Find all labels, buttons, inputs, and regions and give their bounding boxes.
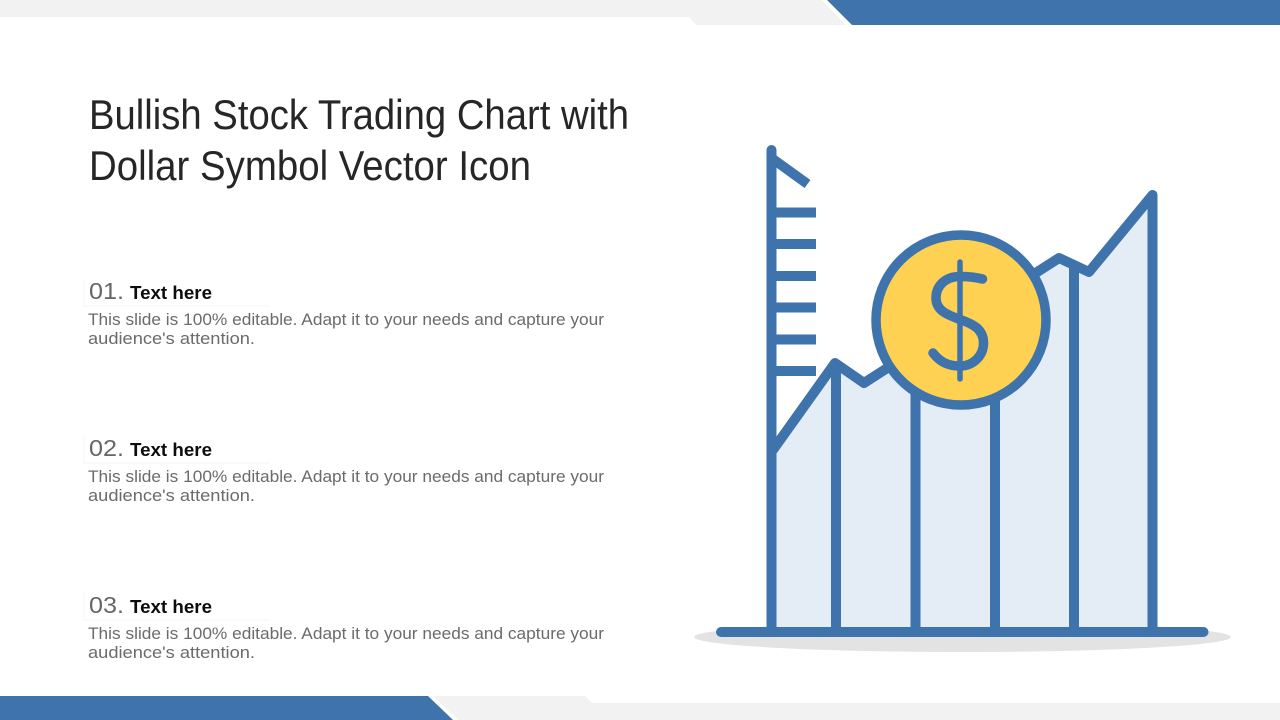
text block 02: 02. (89, 435, 124, 461)
text block 03: audience's attention. (88, 643, 255, 662)
text block 03: This slide is 100% editable. Adapt it to your needs and capture your (88, 624, 604, 643)
text block 02: This slide is 100% editable. Adapt it to your needs and capture your (88, 467, 604, 486)
text block 01: This slide is 100% editable. Adapt it to your needs and capture your (88, 310, 604, 329)
text block 01: audience's attention. (88, 329, 255, 348)
text block 03: 03. (89, 592, 124, 618)
chart area fill (771, 195, 1152, 632)
title (89, 91, 629, 189)
title: Dollar Symbol Vector Icon (89, 142, 531, 189)
bottom banner (0, 696, 1280, 720)
text block 03 (84, 592, 604, 662)
vertical axis with arrow and ticks (771, 150, 816, 632)
chart bars (836, 264, 1074, 632)
title: Bullish Stock Trading Chart with (89, 91, 629, 138)
icon: bullish stock chart with dollar coin (694, 150, 1231, 652)
text block 02: audience's attention. (88, 486, 255, 505)
trend line (772, 195, 1152, 632)
ground shadow (694, 622, 1231, 652)
baseline (721, 627, 1204, 637)
text block 02: Text here (130, 439, 212, 460)
top banner (0, 0, 1280, 25)
text block 02 (84, 435, 604, 505)
text block 01: 01. (89, 278, 124, 304)
text block 01: Text here (130, 282, 212, 303)
text block 03: Text here (130, 596, 212, 617)
text block 01 (84, 278, 604, 348)
icon: dollar coin (876, 235, 1046, 405)
